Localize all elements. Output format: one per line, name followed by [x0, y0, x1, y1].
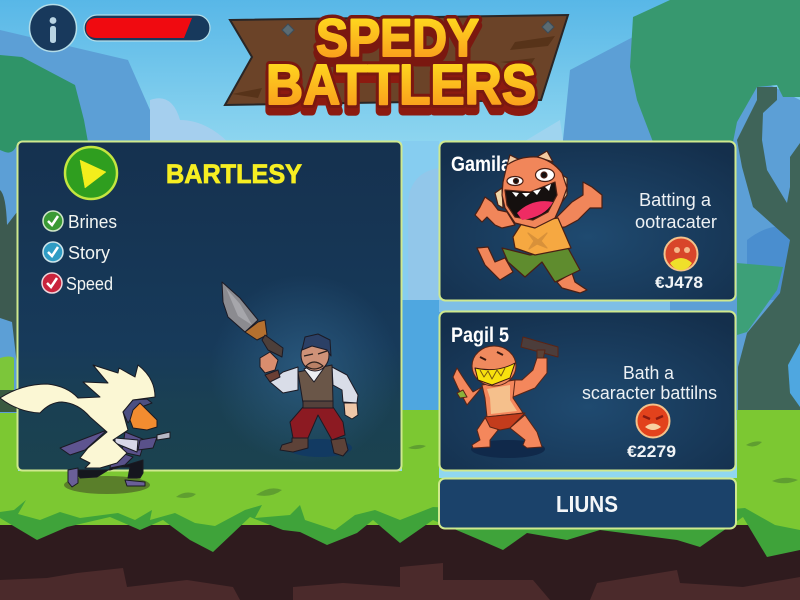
- arms: [270, 367, 298, 393]
- card description: scaracter battilns: [582, 383, 717, 403]
- card description: ootracater: [635, 212, 717, 232]
- hands: [260, 352, 278, 373]
- character: orange ogre with hammer: [453, 337, 558, 458]
- play button: [65, 147, 117, 199]
- card price: €2279: [627, 443, 676, 461]
- right tree canopy: [630, 0, 800, 142]
- list item: Speed: [42, 273, 113, 294]
- left leg: [477, 247, 513, 280]
- ground shadow: [64, 476, 150, 494]
- torso: [110, 450, 133, 468]
- hammer: [521, 337, 558, 357]
- ground shadow: [471, 440, 545, 458]
- sign nails: [282, 21, 554, 36]
- torso: [482, 380, 523, 417]
- side hair: [495, 175, 567, 208]
- lower right gap: [788, 343, 800, 407]
- strip between cards: [439, 300, 670, 312]
- card price: €J478: [655, 274, 703, 292]
- panel frame: [18, 142, 402, 470]
- title word: SPEDY: SPEDY: [316, 9, 479, 68]
- vest: [298, 365, 333, 403]
- list item: Story: Story: [68, 242, 111, 263]
- character: white-haired runner: [0, 365, 170, 494]
- belly: [487, 385, 517, 414]
- cloud behind cards: [408, 168, 439, 300]
- right blue mountain: [402, 37, 800, 420]
- teeth: [512, 184, 551, 197]
- hair: [302, 334, 331, 356]
- arms: [453, 368, 482, 405]
- card description: [635, 190, 717, 232]
- info button: [30, 4, 76, 52]
- character: swordsman: [222, 282, 358, 457]
- legs: [75, 460, 143, 478]
- right leg: [557, 273, 587, 293]
- tongue: [517, 201, 553, 220]
- loincloth: [485, 413, 525, 430]
- hair and scarf: [0, 365, 155, 468]
- right hill: [747, 226, 790, 300]
- head: [301, 339, 329, 371]
- shirt: [513, 218, 571, 255]
- icon: character token: [664, 238, 698, 270]
- panel: Pagil 5 card: [440, 312, 736, 470]
- sleeve: [138, 437, 157, 450]
- left side band: [0, 145, 18, 420]
- right tree lower foliage: [737, 263, 783, 335]
- wooden sign: [225, 15, 568, 105]
- heading: BARTLESY: [166, 159, 302, 189]
- grass edge: [0, 495, 800, 557]
- legs: [290, 407, 345, 440]
- card title: Pagil 5: [451, 324, 509, 347]
- left tree trunk: [0, 190, 17, 365]
- icon: angry token: [636, 404, 670, 438]
- title word: BATTLERS: BATTLERS: [266, 53, 536, 117]
- right tree trunk: [737, 87, 800, 417]
- shorts: [502, 248, 580, 282]
- list item: Speed: Speed: [66, 273, 113, 294]
- arm: [115, 438, 138, 452]
- wrist band: [457, 390, 467, 398]
- grass field: [0, 410, 800, 540]
- list item: Story: [43, 242, 111, 263]
- cuff: [265, 370, 280, 382]
- eyes: [480, 352, 503, 360]
- head: [502, 157, 567, 228]
- left leg: [472, 418, 498, 448]
- mouth: [475, 363, 515, 385]
- list item: Brines: Brines: [68, 211, 117, 232]
- left gap hill: [0, 356, 14, 390]
- title banner: [225, 9, 568, 124]
- list item: Brines: [43, 211, 117, 232]
- button: LIUNS: [439, 478, 736, 528]
- card frame: [440, 142, 736, 300]
- face: [130, 403, 157, 430]
- left blue mountain: [0, 30, 180, 145]
- moustache and eyes: [304, 351, 327, 369]
- head: [472, 346, 516, 386]
- ground shadow: [288, 439, 352, 457]
- left dark ground: [0, 390, 17, 412]
- belt: [303, 401, 333, 408]
- grass tufts: [176, 441, 798, 498]
- eyes: [507, 176, 523, 186]
- mouth: [505, 182, 557, 220]
- soft glow behind swordsman: [210, 275, 400, 465]
- left arm: [475, 197, 515, 228]
- title word: BATTLERS: BATTLERS: [266, 60, 536, 124]
- lower soil: [0, 563, 800, 600]
- shirt emblem: [528, 233, 547, 249]
- title word: SPEDY: SPEDY: [316, 15, 479, 74]
- sky behind cards: [402, 141, 439, 300]
- panel: Gamila card: [440, 142, 736, 300]
- sword: [222, 282, 283, 357]
- character: grinning orange creature: [475, 151, 602, 293]
- boots: [280, 438, 348, 456]
- title word: SPEDY: SPEDY: [316, 9, 479, 68]
- wood grain: [232, 36, 555, 98]
- left cloud: [150, 98, 228, 145]
- health bar: [84, 15, 210, 41]
- teeth line: [480, 368, 505, 379]
- shirt collar: [304, 364, 326, 382]
- shoes: [68, 468, 145, 487]
- cape: [60, 430, 107, 455]
- card description: Batting a: [639, 190, 712, 210]
- card description: [582, 363, 717, 403]
- grass top: [0, 490, 800, 530]
- dark hair: [123, 399, 152, 423]
- ears: [507, 151, 553, 165]
- panel: main character: [18, 142, 402, 470]
- soil: [0, 525, 800, 600]
- left tree canopy: [0, 55, 88, 153]
- right leg: [510, 415, 542, 448]
- right arm: [552, 182, 602, 228]
- card title: Gamila: [451, 153, 511, 176]
- gun hand: [157, 432, 170, 440]
- title word: BATTLERS: BATTLERS: [266, 53, 536, 117]
- button: LIUNS: LIUNS: [556, 491, 618, 517]
- card description: Bath a: [623, 363, 675, 383]
- card frame: [440, 312, 736, 470]
